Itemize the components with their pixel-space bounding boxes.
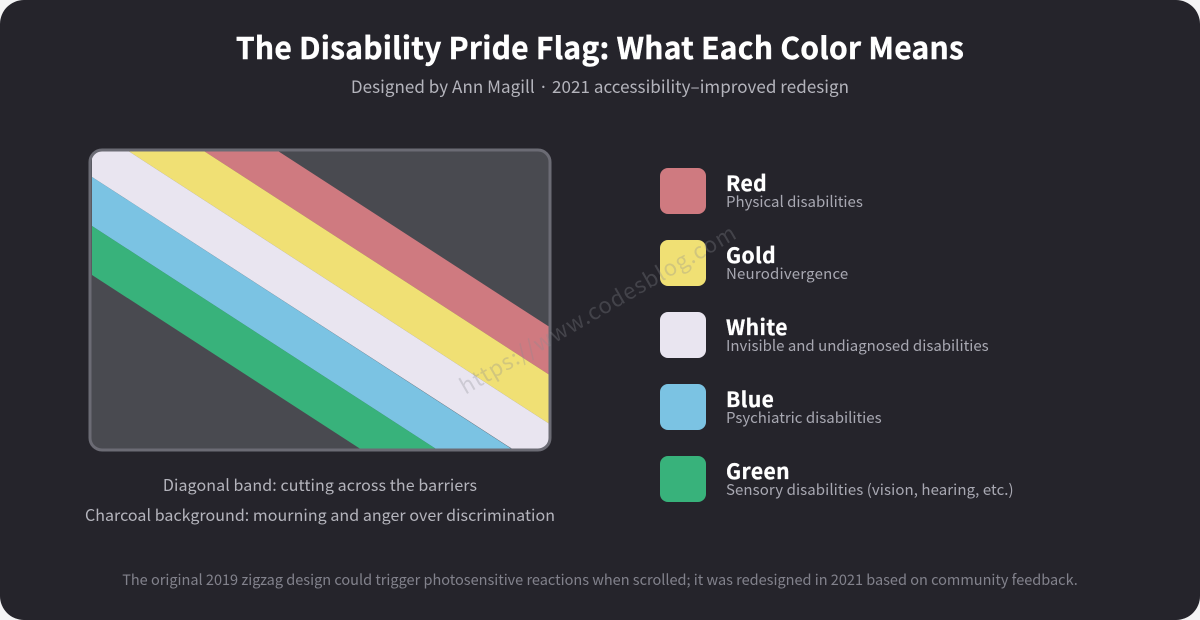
band: red	[205, 152, 548, 374]
band: green	[92, 226, 436, 448]
caption: diagonal band: Diagonal band: cutting across the barriers	[163, 472, 477, 496]
legend: blue: Blue	[726, 384, 774, 414]
legend: gold: Gold	[726, 240, 776, 270]
subtitle: Designed by Ann Magill · 2021 accessibility–improved redesign	[351, 73, 849, 98]
legend: blue	[660, 384, 882, 430]
legend: red: Red	[726, 168, 767, 198]
title: The Disability Pride Flag: What Each Color Means	[236, 24, 964, 68]
legend: white: Invisible and undiagnosed disabilities	[726, 335, 989, 356]
legend: blue: Psychiatric disabilities	[726, 407, 882, 428]
footnote: The original 2019 zigzag design could trigger photosensitive reactions when scrolled; it was redesigned in 2021 based on community feedback.	[122, 569, 1078, 590]
legend: red: Physical disabilities	[726, 191, 863, 212]
legend: white	[660, 312, 989, 358]
band: blue	[92, 177, 511, 448]
flag	[88, 148, 552, 452]
legend: green	[660, 456, 1014, 502]
legend: white: White	[726, 312, 788, 342]
legend: green: Sensory disabilities (vision, hearing, etc.)	[726, 479, 1014, 500]
legend: green: Green	[726, 456, 790, 486]
watermark: https://www.codesblog.com	[453, 215, 742, 401]
legend: red	[660, 168, 863, 214]
band: gold	[130, 152, 548, 424]
caption: charcoal background: Charcoal background: mourning and anger over discrimination	[85, 502, 555, 526]
legend: gold	[660, 240, 848, 286]
band: white	[92, 152, 548, 448]
legend: gold: Neurodivergence	[726, 263, 848, 284]
